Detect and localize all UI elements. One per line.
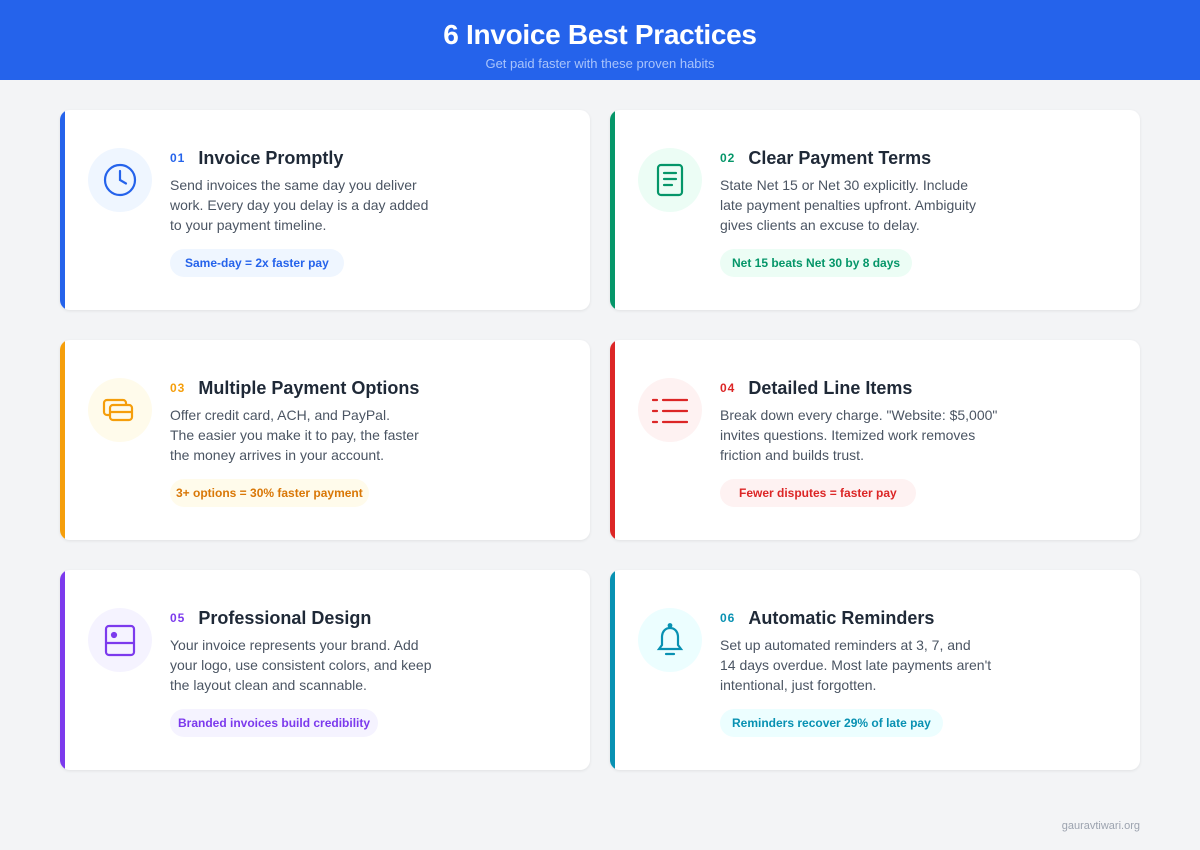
text: late payment penalties upfront. Ambiguity	[720, 197, 976, 213]
pill: 3+ options = 30% faster payment	[176, 486, 363, 500]
heading: 03 Multiple Payment Options	[170, 378, 419, 398]
text	[170, 637, 432, 693]
text	[720, 637, 992, 693]
panel: multiple payment options	[60, 340, 590, 540]
text: invites questions. Itemized work removes	[720, 427, 975, 443]
pill: Fewer disputes = faster pay	[739, 486, 897, 500]
text	[170, 407, 419, 463]
panel: automatic reminders	[610, 570, 1140, 770]
panel: invoice promptly	[60, 110, 590, 310]
pill	[170, 249, 344, 277]
heading: 01 Invoice Promptly	[170, 148, 343, 168]
pill	[170, 709, 378, 737]
text: Set up automated reminders at 3, 7, and	[720, 637, 971, 653]
title: 6 Invoice Best Practices	[443, 19, 757, 50]
text	[720, 407, 997, 463]
text: State Net 15 or Net 30 explicitly. Include	[720, 177, 968, 193]
pill	[720, 479, 916, 507]
icon: clock	[88, 148, 152, 212]
text: gives clients an excuse to delay.	[720, 217, 920, 233]
text: The easier you make it to pay, the faster	[170, 427, 419, 443]
pill	[720, 709, 943, 737]
text: friction and builds trust.	[720, 447, 864, 463]
text	[170, 177, 428, 233]
pill: Reminders recover 29% of late pay	[732, 716, 931, 730]
subtitle: Get paid faster with these proven habits	[485, 56, 715, 71]
icon: document	[638, 148, 702, 212]
heading: 02 Clear Payment Terms	[720, 148, 931, 168]
heading: 04 Detailed Line Items	[720, 378, 912, 398]
text: intentional, just forgotten.	[720, 677, 876, 693]
pill: Net 15 beats Net 30 by 8 days	[732, 256, 900, 270]
text: the money arrives in your account.	[170, 447, 384, 463]
pill: Same-day = 2x faster pay	[185, 256, 329, 270]
text: Send invoices the same day you deliver	[170, 177, 417, 193]
text: your logo, use consistent colors, and keep	[170, 657, 432, 673]
icon: bell	[638, 608, 702, 672]
icon: layout	[88, 608, 152, 672]
heading: 05 Professional Design	[170, 608, 371, 628]
footer credit: gauravtiwari.org	[1062, 820, 1140, 832]
pill	[170, 479, 369, 507]
heading: 06 Automatic Reminders	[720, 608, 934, 628]
text: Your invoice represents your brand. Add	[170, 637, 419, 653]
panel: professional design	[60, 570, 590, 770]
text: Offer credit card, ACH, and PayPal.	[170, 407, 390, 423]
text: the layout clean and scannable.	[170, 677, 367, 693]
text: work. Every day you delay is a day added	[170, 197, 428, 213]
text: to your payment timeline.	[170, 217, 326, 233]
text: 14 days overdue. Most late payments aren't	[720, 657, 991, 673]
text	[720, 177, 976, 233]
header	[0, 0, 1200, 80]
icon: list	[638, 378, 702, 442]
panel: clear payment terms	[610, 110, 1140, 310]
pill	[720, 249, 912, 277]
pill: Branded invoices build credibility	[178, 716, 370, 730]
panel: detailed line items	[610, 340, 1140, 540]
icon: cards	[88, 378, 152, 442]
text: Break down every charge. "Website: $5,000"	[720, 407, 997, 423]
